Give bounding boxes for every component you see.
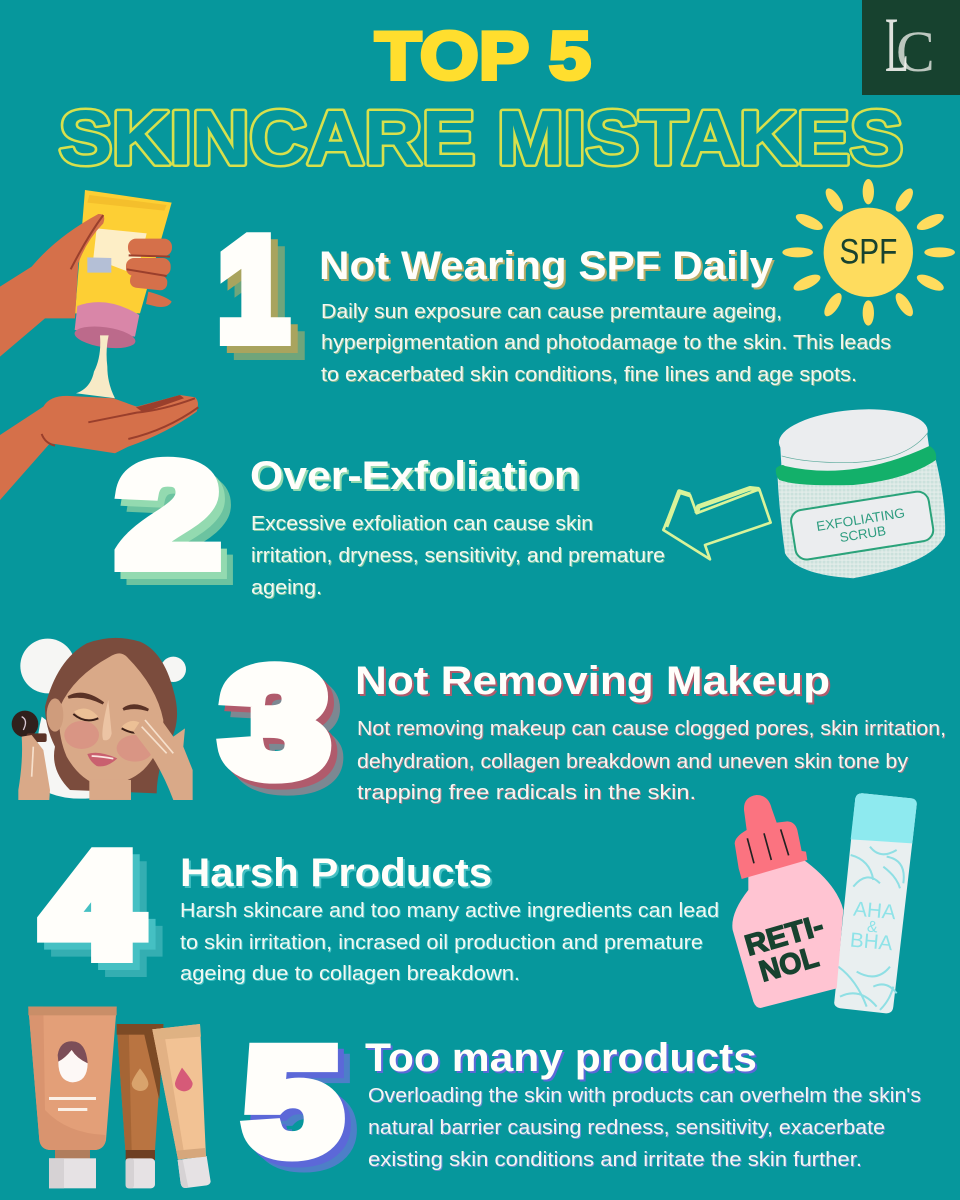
number 1: 1 xyxy=(218,208,288,370)
number 1: 1 xyxy=(225,215,295,377)
icon: three tubes xyxy=(28,1007,211,1188)
icon: AHA BHA bottle xyxy=(834,793,917,1013)
title: skincare mistakes: SKINCARE MISTAKES xyxy=(59,96,903,181)
body text 4 xyxy=(180,900,719,985)
number 5: 5 xyxy=(250,1023,348,1191)
logo xyxy=(862,0,960,95)
number 3: 3 xyxy=(235,651,340,819)
icon: retinol dropper bottle: NOL xyxy=(756,940,822,989)
icon: SPF sun xyxy=(782,179,955,326)
body text 3: dehydration, collagen breakdown and uneven skin tone by xyxy=(357,751,908,773)
icon: arrow xyxy=(663,488,771,559)
heading 4: Harsh Products xyxy=(180,851,492,895)
icon: exfoliating scrub jar: EXFOLIATING xyxy=(815,505,906,534)
body text 3 xyxy=(357,718,946,804)
title: top 5: TOP 5 xyxy=(375,18,591,94)
number 2: 2 xyxy=(117,435,219,596)
icon: exfoliating scrub jar: SCRUB xyxy=(839,523,887,545)
body text 4: Harsh skincare and too many active ingredients can lead xyxy=(180,900,719,922)
body text 5: natural barrier causing redness, sensitivity, exacerbate xyxy=(368,1117,885,1139)
body text 4: ageing due to collagen breakdown. xyxy=(180,963,520,985)
number 2: 2 xyxy=(129,448,231,609)
body text 1: Daily sun exposure can cause premtaure ageing, xyxy=(321,301,782,323)
body text 5: existing skin conditions and irritate the skin further. xyxy=(368,1149,862,1171)
icon: retinol dropper bottle xyxy=(732,795,843,1008)
icon: exfoliating scrub jar xyxy=(776,404,945,578)
body text 1: to exacerbated skin conditions, fine lines and age spots. xyxy=(321,364,857,386)
heading 5: Too many products xyxy=(365,1036,757,1080)
number 2: 2 xyxy=(123,442,225,603)
body text 2: irritation, dryness, sensitivity, and premature xyxy=(251,545,665,567)
body text 3: Not removing makeup can cause clogged pores, skin irritation, xyxy=(357,718,946,740)
logo: C xyxy=(896,19,935,84)
number 4: 4 xyxy=(51,831,147,993)
number 4: 4 xyxy=(44,824,140,986)
body text 5 xyxy=(368,1085,921,1171)
icon: AHA BHA bottle: BHA xyxy=(849,929,894,955)
number 5: 5 xyxy=(244,1017,342,1185)
title: skincare mistakes: SKINCARE MISTAKES xyxy=(59,96,903,181)
number 1: 1 xyxy=(232,222,302,384)
icon: AHA BHA bottle: AHA xyxy=(852,898,897,924)
body text 2: Excessive exfoliation can cause skin xyxy=(251,513,593,535)
body text 1 xyxy=(321,301,891,386)
body text 2: ageing. xyxy=(251,577,322,599)
heading 2: Over-Exfoliation xyxy=(250,454,580,498)
heading 3: Not Removing Makeup xyxy=(355,659,830,703)
icon: hands with sunscreen tube xyxy=(0,190,198,500)
icon: retinol dropper bottle: RETI- xyxy=(741,909,827,963)
heading 1: Not Wearing SPF Daily xyxy=(319,244,774,288)
number 3: 3 xyxy=(223,639,328,807)
number 3: 3 xyxy=(229,645,334,813)
number 4: 4 xyxy=(58,838,154,1000)
icon: AHA BHA bottle: & xyxy=(866,919,879,936)
body text 1: hyperpigmentation and photodamage to the skin. This leads xyxy=(321,332,891,354)
body text 3: trapping free radicals in the skin. xyxy=(357,782,696,804)
number 5: 5 xyxy=(256,1028,354,1196)
logo: L xyxy=(885,3,909,89)
body text 2 xyxy=(251,513,665,599)
body text 5: Overloading the skin with products can overhelm the skin's xyxy=(368,1085,921,1107)
body text 4: to skin irritation, incrased oil production and premature xyxy=(180,932,703,954)
icon: woman removing makeup xyxy=(12,638,193,800)
icon: SPF sun: SPF xyxy=(839,232,897,271)
